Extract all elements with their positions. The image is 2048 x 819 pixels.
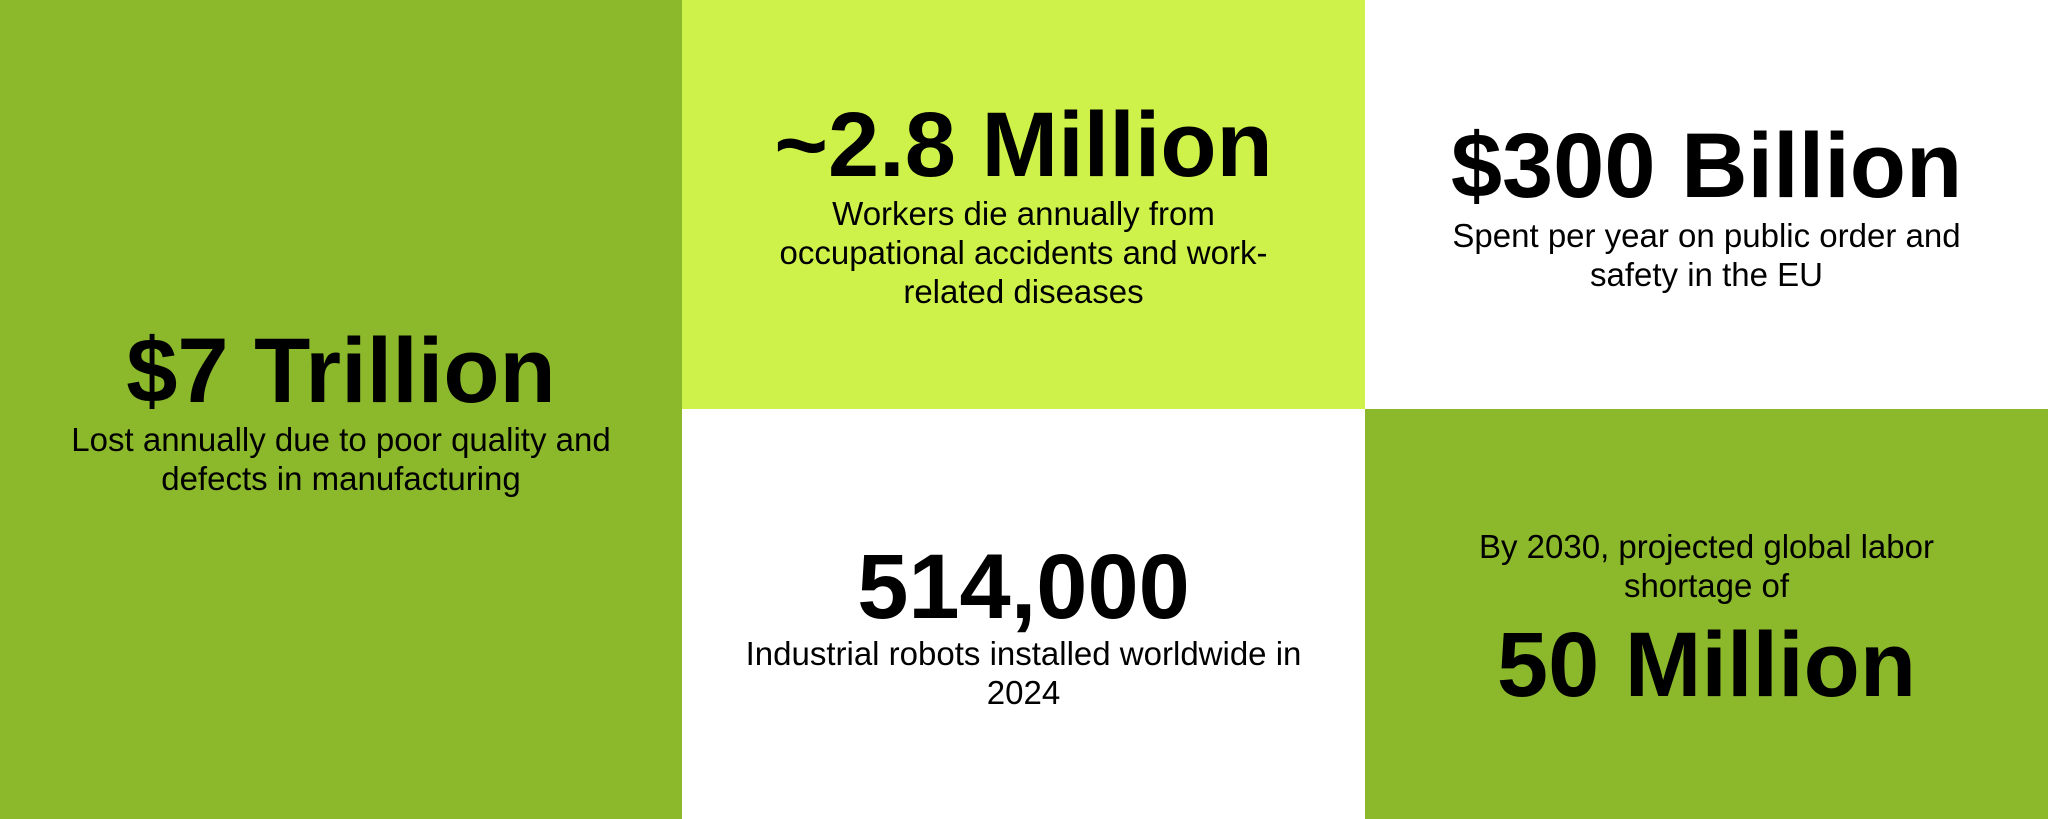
text: $300 Billion description: safety in the EU xyxy=(1590,256,1823,293)
text: 2.8 Million description: Workers die annually from xyxy=(832,195,1215,232)
panel: $7 Trillion xyxy=(0,0,682,819)
text: 514,000 description xyxy=(746,635,1301,711)
text: 50 Million intro: shortage of xyxy=(1624,567,1789,604)
text: 50 Million intro xyxy=(1479,528,1934,604)
text: 50 Million intro: By 2030, projected global labor xyxy=(1479,528,1934,565)
stat: ~2.8 Million: ~2.8 Million xyxy=(774,94,1273,196)
panel: $300 Billion xyxy=(1365,0,2048,409)
stat: $7 Trillion: $7 Trillion xyxy=(126,320,556,422)
text: $300 Billion description xyxy=(1452,217,1961,293)
text: $7 Trillion description: Lost annually due to poor quality and xyxy=(71,421,611,458)
stat: 514,000: 514,000 xyxy=(857,536,1190,638)
panel: 50 Million xyxy=(1365,409,2048,819)
text: 2.8 Million description: occupational accidents and work- xyxy=(780,234,1267,271)
text: 2.8 Million description xyxy=(780,195,1267,310)
text: $7 Trillion description: defects in manufacturing xyxy=(161,460,521,497)
text: 514,000 description: 2024 xyxy=(987,674,1060,711)
stat: $300 Billion: $300 Billion xyxy=(1451,115,1962,217)
text: 2.8 Million description: related diseases xyxy=(903,273,1144,310)
text: $300 Billion description: Spent per year on public order and xyxy=(1452,217,1961,254)
panel: ~2.8 Million xyxy=(682,0,1365,409)
stat: 50 Million: 50 Million xyxy=(1497,614,1916,716)
text: $7 Trillion description xyxy=(71,421,611,497)
panel: 514,000 xyxy=(682,409,1365,819)
text: 514,000 description: Industrial robots installed worldwide in xyxy=(746,635,1301,672)
